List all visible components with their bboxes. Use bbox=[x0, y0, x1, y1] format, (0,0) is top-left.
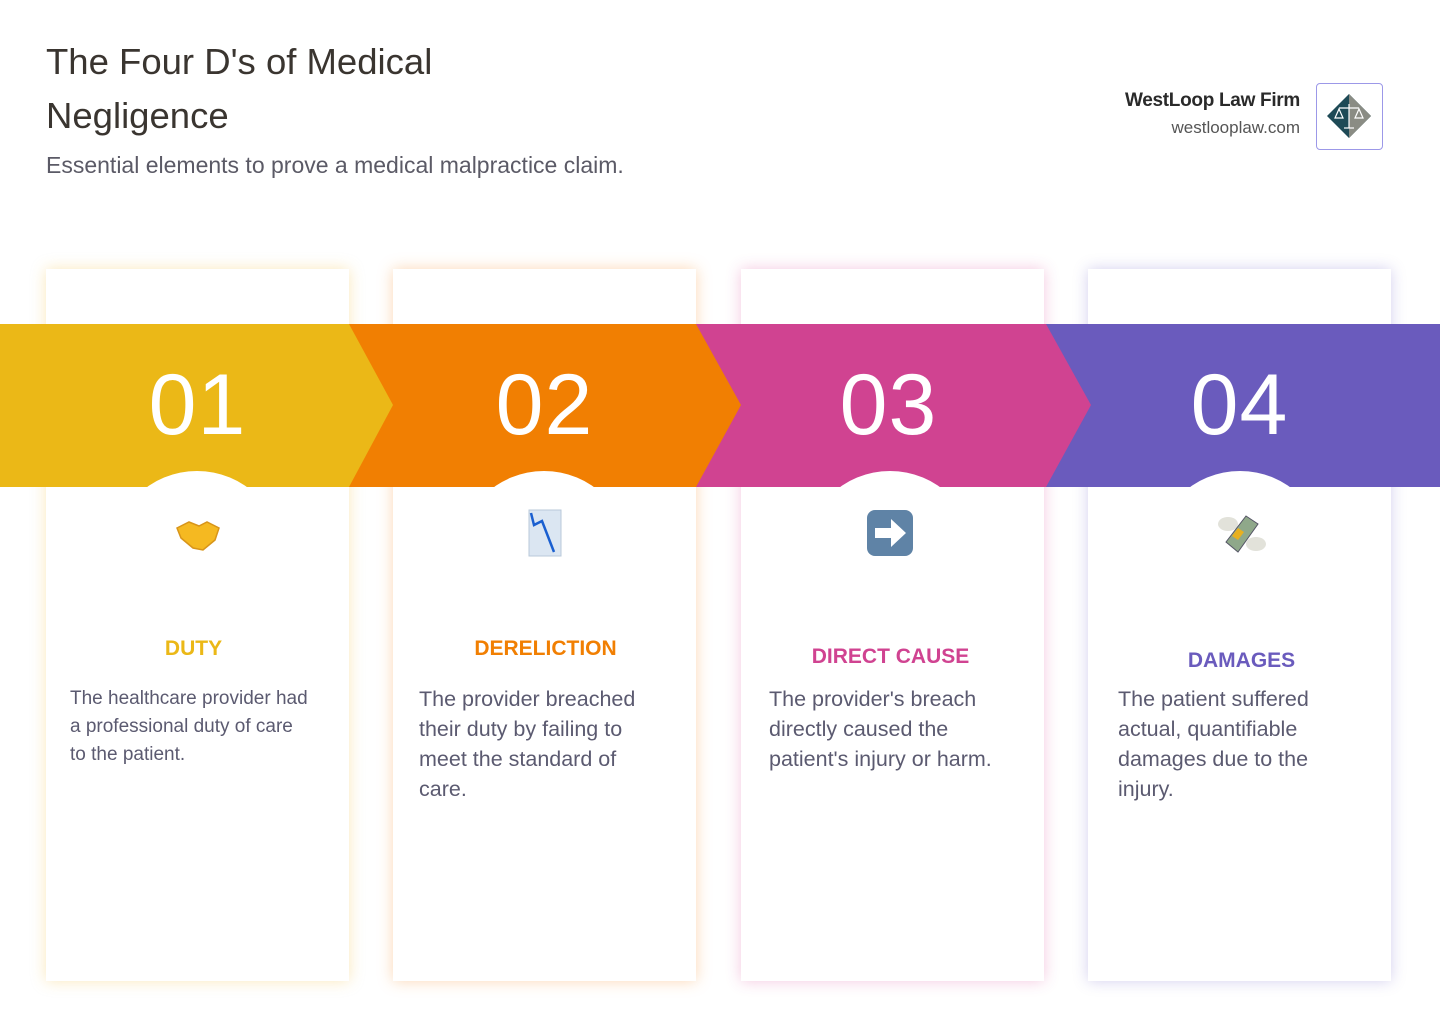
text: 02 bbox=[496, 357, 593, 453]
card 2 bbox=[393, 269, 696, 981]
heading: duty: DUTY bbox=[165, 637, 222, 660]
subtitle: Essential elements to prove a medical malpractice claim. bbox=[46, 152, 624, 178]
card 4 bbox=[1088, 269, 1391, 981]
text: duty: The healthcare provider had a professional duty of care to the patient. bbox=[70, 688, 308, 765]
icon: handshake bbox=[176, 521, 220, 551]
brand text: WestLoop Law Firm bbox=[1125, 90, 1300, 111]
heading: direct cause: DIRECT CAUSE bbox=[812, 645, 969, 668]
card 1 bbox=[46, 269, 349, 981]
brand text bbox=[1125, 90, 1300, 137]
logo bbox=[1316, 83, 1383, 150]
brand text: westlooplaw.com bbox=[1171, 118, 1300, 137]
numbers: 01 bbox=[149, 357, 246, 453]
heading: dereliction: DERELICTION bbox=[474, 637, 617, 660]
title: The Four D's of Medical Negligence bbox=[46, 41, 432, 136]
card 3 bbox=[741, 269, 1044, 981]
text: damages: The patient suffered actual, quantifiable damages due to the injury. bbox=[1118, 687, 1309, 801]
heading: damages: DAMAGES bbox=[1188, 649, 1295, 672]
circles bbox=[111, 471, 283, 643]
icon: money with wings bbox=[1218, 515, 1266, 553]
text: direct cause: The provider's breach directly caused the patient's injury or harm. bbox=[769, 687, 992, 771]
text: 03 bbox=[840, 357, 937, 453]
text: dereliction: The provider breached their duty by failing to meet the standard of care. bbox=[419, 687, 635, 801]
arrow band bbox=[0, 324, 1440, 487]
text: 04 bbox=[1191, 357, 1288, 453]
icon: chart decreasing bbox=[528, 510, 562, 556]
icon: right arrow bbox=[867, 510, 913, 556]
